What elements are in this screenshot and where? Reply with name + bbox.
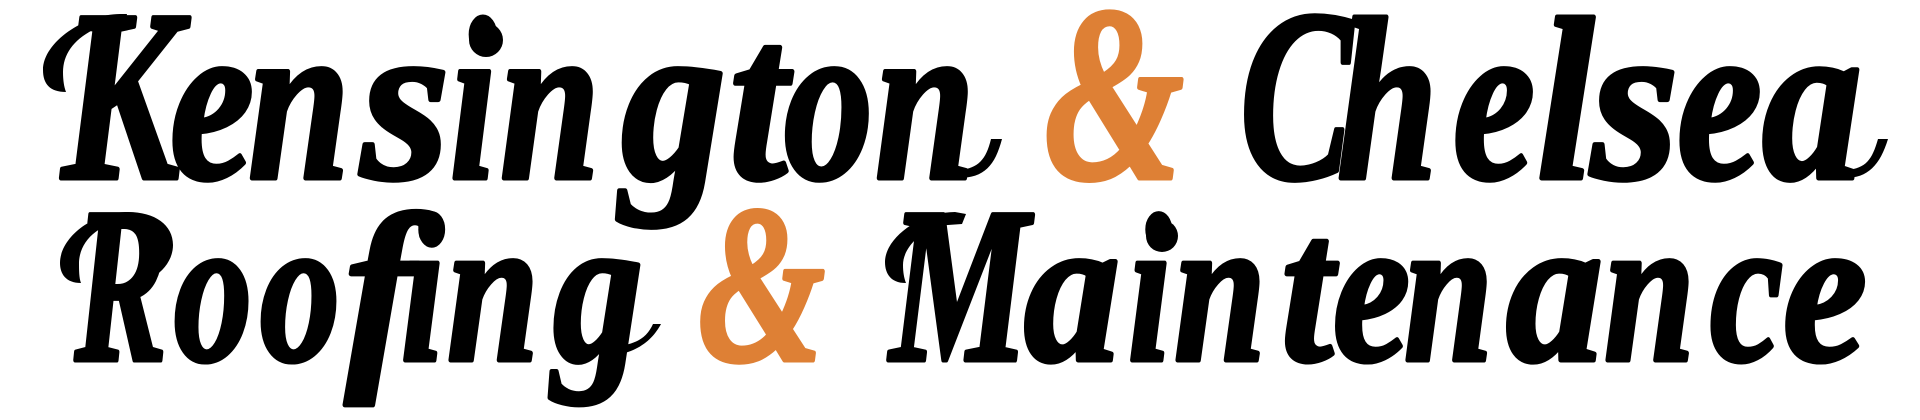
n exit stroke [958,139,1002,178]
word: Roofing: g [550,172,643,406]
word: Roofing: n [447,172,539,406]
word: Maintenance: i [1128,172,1171,406]
word: Roofing: o [260,172,340,406]
g exit stroke [625,324,661,353]
word: Maintenance: n [1174,172,1266,406]
word: Maintenance: c [1710,172,1783,406]
flourish: R swash [60,212,173,283]
word: Maintenance [885,163,1867,409]
ampersand: line two: & [698,159,825,409]
flourish: K swash [43,14,127,92]
flourish: M swash [885,212,966,283]
word: Roofing: R [74,163,167,409]
word: Roofing [60,163,661,409]
i dot [469,23,503,57]
word: Maintenance: t [1281,172,1338,406]
i dot [1146,220,1178,252]
word: Roofing: f [345,172,433,406]
word: Kensington [43,0,1002,231]
word: Maintenance: a [1024,172,1120,406]
word: Roofing: o [174,172,252,406]
word: Maintenance: a [1506,172,1603,406]
word: Chelsea [1240,0,1888,231]
word: Maintenance: n [1404,172,1493,406]
word: Maintenance: e [1783,172,1867,406]
word: Maintenance: M [888,163,1034,409]
word: Roofing: i [401,172,444,406]
word: Maintenance: n [1604,172,1695,406]
a exit stroke [1845,139,1888,178]
word: Maintenance: e [1333,172,1410,406]
